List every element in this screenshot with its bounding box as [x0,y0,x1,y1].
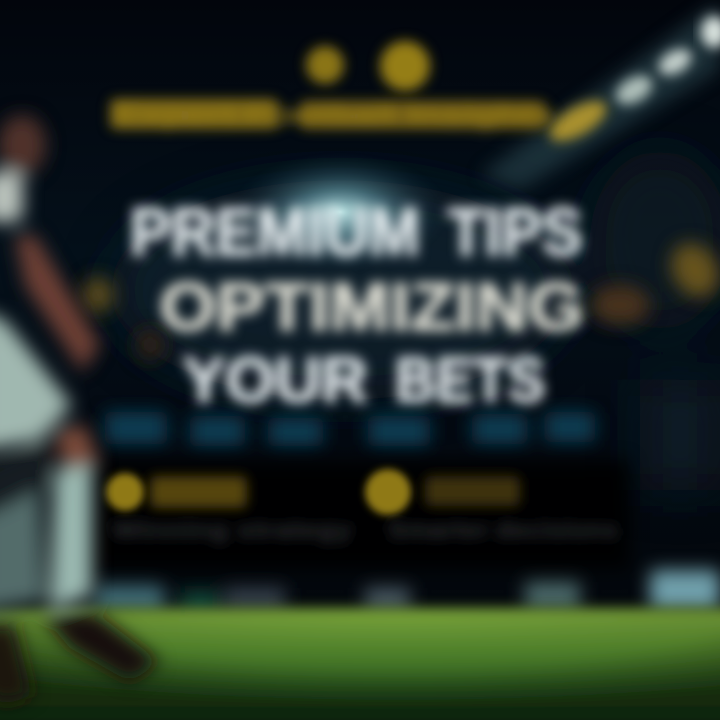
gold subtitle: Expert Football Insights [115,98,555,131]
heading line 1 word 2: TIPS [448,194,582,270]
player front boot [42,612,160,682]
player shirt top [0,172,23,222]
icon: gold coin right [365,469,411,515]
player back boot [0,625,32,705]
player arm [15,235,100,372]
player front sock [50,465,92,610]
player back leg [0,490,45,610]
info item right [365,469,618,544]
blue stat row [105,412,595,446]
label right [425,476,520,506]
stadium backdrop haze [110,150,720,490]
info item left [106,473,353,544]
heading line 3 word 1: YOUR [182,344,368,416]
pitch [0,608,720,720]
heading line 1: PREMIUM [130,194,420,270]
player thigh [55,425,100,475]
player head [0,115,46,175]
rating icons [306,41,430,91]
description right: Smarter decisions [388,517,618,544]
player shorts [0,310,72,450]
player dark gap [0,440,50,520]
label left [150,476,247,508]
gold side sparks [82,235,720,361]
heading line 3 word 2: BETS [395,344,545,416]
main heading [130,194,584,416]
player [0,115,160,705]
floodlights [480,0,720,190]
centre glow [230,152,450,272]
description left: Winning strategy [112,517,353,544]
icon: gold coin left [106,473,144,511]
black info band [90,460,630,570]
crowd lights above pitch [95,570,720,613]
heading line 2: OPTIMIZING [160,269,584,345]
